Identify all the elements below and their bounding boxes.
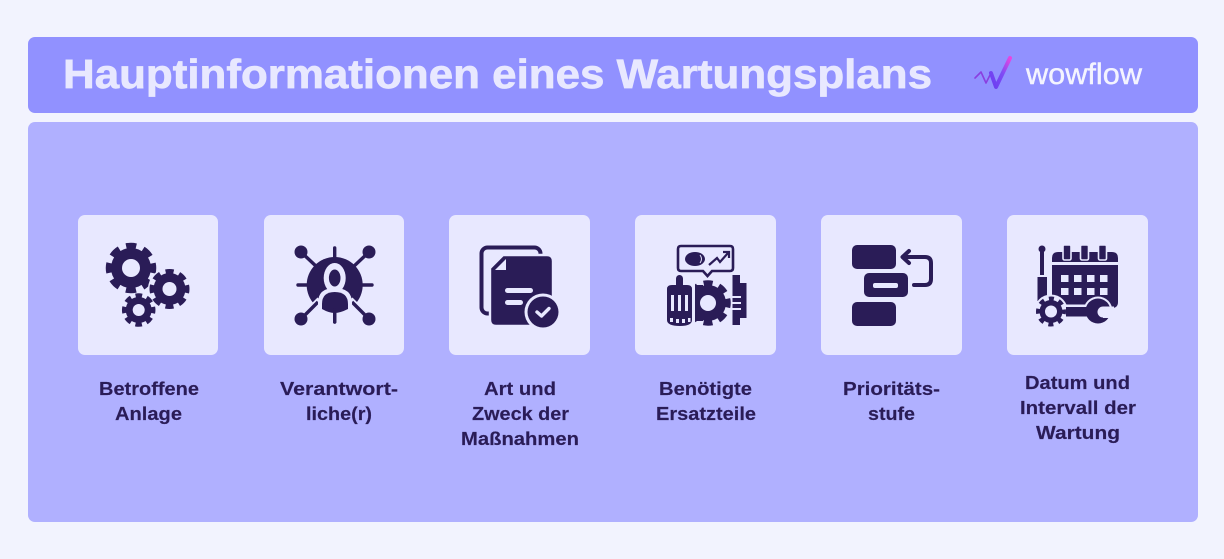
label: Prioritäts- [843,379,940,399]
item: Benötigte Ersatzteile [635,215,776,424]
label: Zweck der [472,404,569,424]
label: Benötigte [659,379,752,399]
label: stufe [868,404,915,424]
item: Datum und Intervall der Wartung [1007,215,1148,443]
label: Art und [484,379,556,399]
icon: priority blocks [852,245,931,326]
item: Art und Zweck der Maßnahmen [449,215,590,449]
label: Wartung [1036,423,1120,443]
label [461,379,579,449]
label: Betroffene [99,379,199,399]
label [843,379,940,424]
label: liche(r) [306,404,372,424]
label: Verantwort- [280,379,398,399]
item: Prioritätsstufe [821,215,962,424]
main panel [28,122,1198,522]
title: Hauptinformationen eines Wartungsplans [63,51,932,97]
icon: spare parts [667,246,746,326]
label: Maßnahmen [461,429,579,449]
icon: person network [294,246,376,326]
icon: gears [109,246,191,324]
label: Anlage [115,404,182,424]
logo: wowflow: wowflow [1025,58,1142,91]
header banner [28,37,1198,113]
label [280,379,398,424]
item: Verantwortliche(r) [264,215,404,424]
icon: documents with check [482,248,562,330]
label [1020,373,1136,443]
label: Ersatzteile [656,404,756,424]
label: Intervall der [1020,398,1136,418]
logo: wowflow [975,58,1142,91]
label [656,379,756,424]
label: Datum und [1025,373,1130,393]
label [99,379,199,424]
item: Betroffene Anlage [78,215,218,424]
icon: calendar with tools [1034,245,1118,328]
